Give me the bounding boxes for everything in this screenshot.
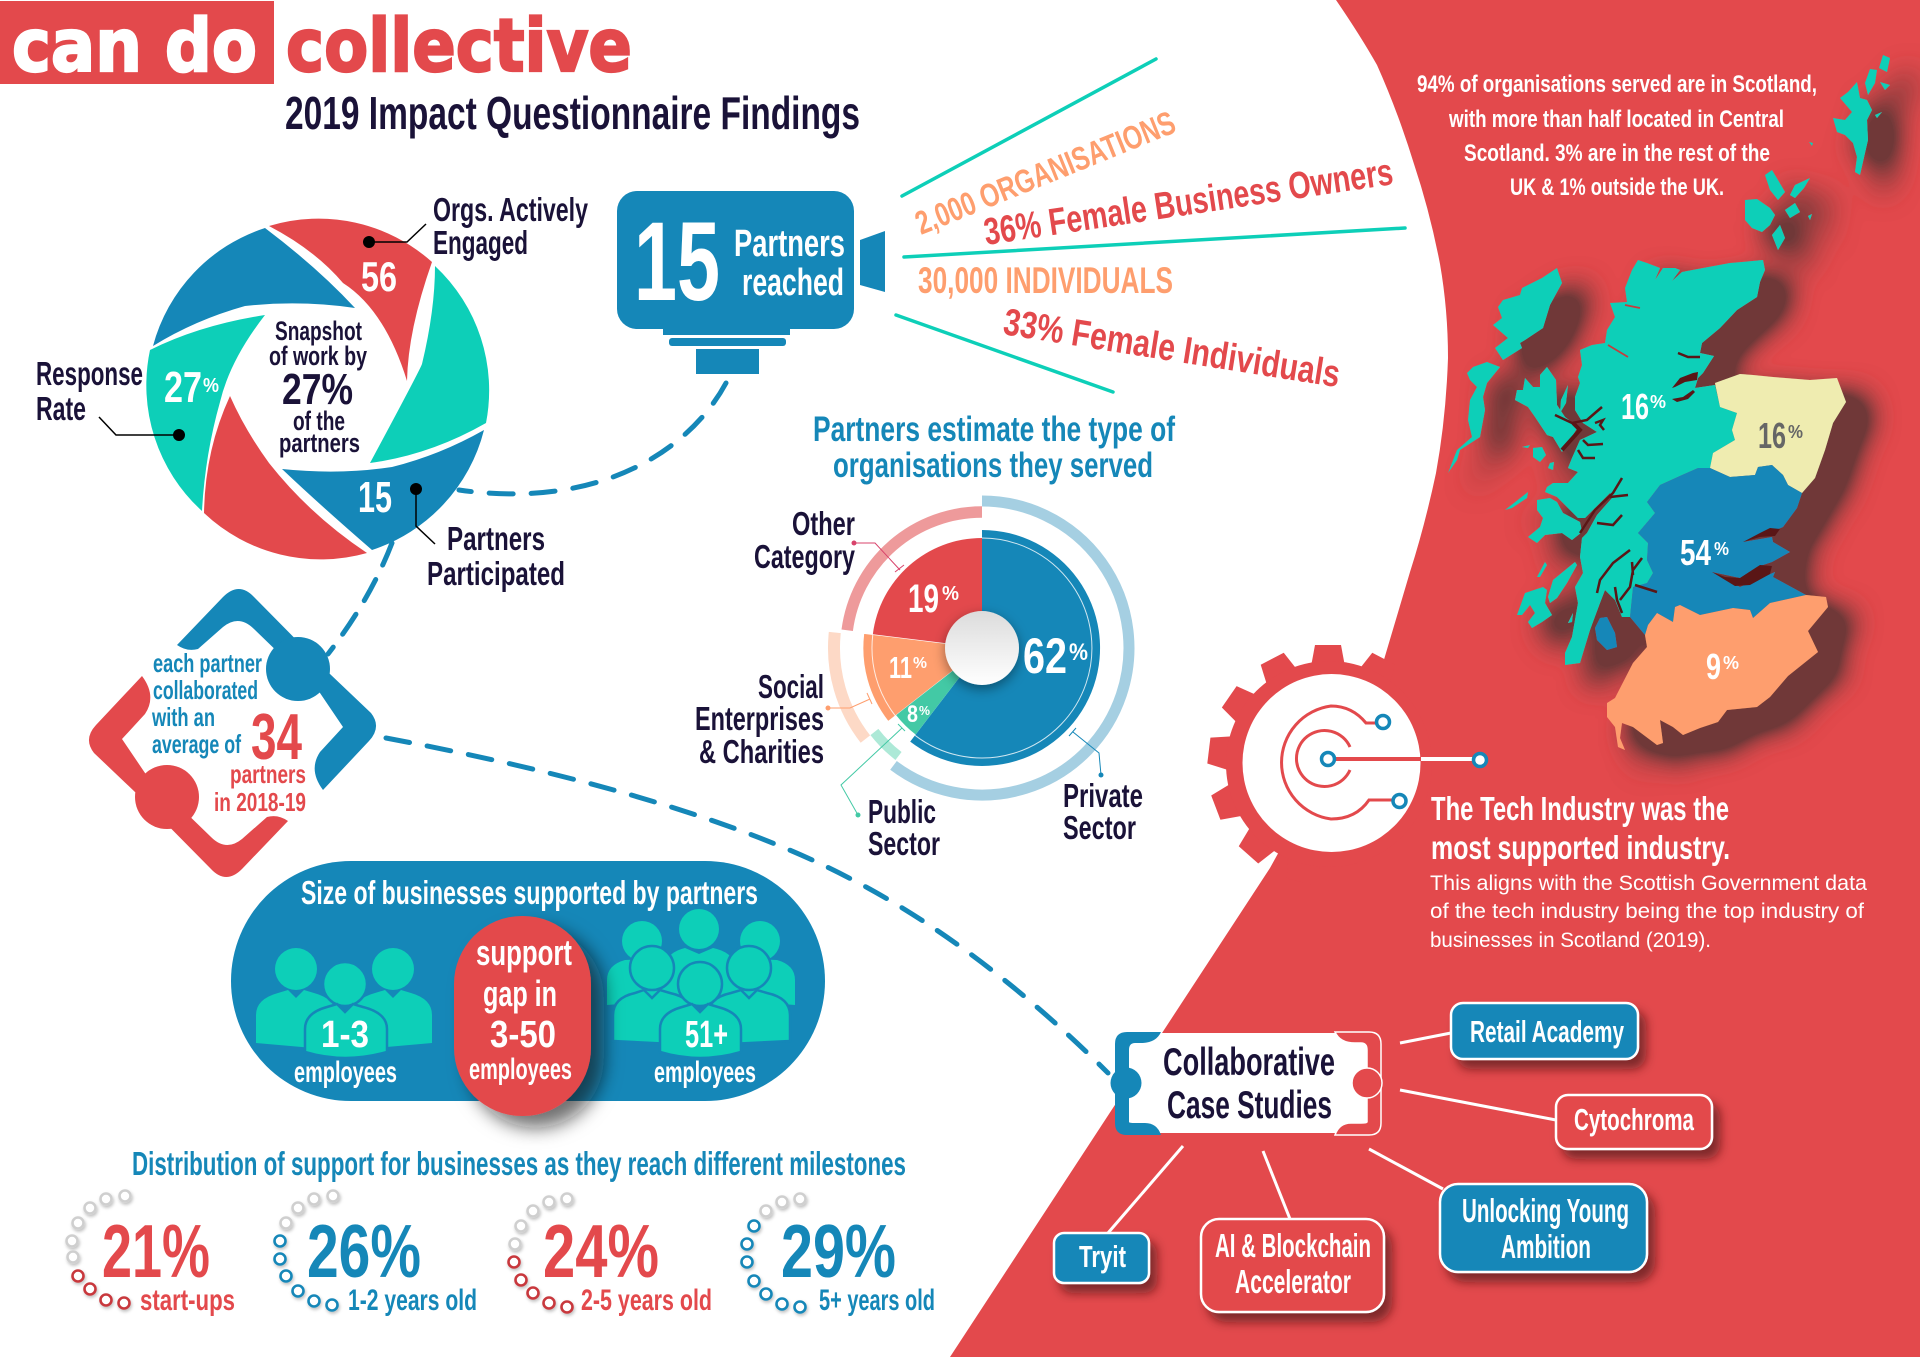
donut values: 19 [908, 577, 939, 621]
map percentages [1621, 386, 1803, 687]
map percentages: % [1714, 539, 1729, 559]
sector: social [863, 634, 982, 721]
text block: organisations in Scotland [1417, 71, 1817, 201]
heading: milestones: Distribution of support for businesses as they reach different milestones [132, 1145, 906, 1182]
donut labels and leaders: & Charities [699, 733, 824, 770]
pie centre text: 27% [282, 365, 353, 414]
red arm [89, 676, 288, 877]
region: North East [1710, 374, 1846, 493]
donut values: % [942, 583, 959, 605]
box: Unlocking Young Ambition: Ambition [1501, 1228, 1591, 1265]
text block: organisations in Scotland: UK & 1% outside the UK. [1510, 174, 1724, 201]
text block: tech industry: of the tech industry being the top industry of [1430, 900, 1864, 923]
box: AI and Blockchain Accelerator: AI & Blockchain [1215, 1227, 1371, 1264]
blade: red lower left [204, 396, 367, 559]
panel: collaborative case studies [1110, 1032, 1382, 1135]
milestone: start-ups: start-ups [140, 1284, 235, 1317]
panel: collaborative case studies: Case Studies [1167, 1084, 1332, 1127]
pie labels and leaders: Rate [36, 390, 86, 427]
partners figure: partners [230, 759, 306, 789]
milestone: start-ups [66, 1190, 235, 1317]
donut labels and leaders: Public [868, 793, 936, 830]
panel: size of businesses: Size of businesses supported by partners [301, 874, 758, 911]
milestone: 5+ years old [742, 1194, 935, 1317]
reach statistics: 30,000 INDIVIDUALS [918, 260, 1173, 301]
pie values: 27 [164, 363, 202, 412]
text block: tech industry: This aligns with the Scottish Government data [1430, 872, 1867, 895]
blade: teal right [370, 266, 489, 463]
pie labels and leaders [36, 191, 588, 592]
icon: tech gear [1207, 645, 1486, 886]
left bracket [1110, 1032, 1161, 1135]
collaboration text: each partner [153, 648, 262, 678]
pie labels and leaders: Orgs. Actively [433, 191, 588, 228]
donut labels and leaders: Enterprises [695, 700, 824, 737]
pie values: % [203, 375, 219, 397]
box: Tryit [1054, 1233, 1149, 1283]
projector: 15 partners reached [617, 191, 885, 374]
donut values [889, 577, 1088, 728]
donut labels and leaders: Other [792, 505, 855, 542]
map of Scotland [1448, 55, 1890, 750]
callout: support gap [454, 916, 591, 1116]
map percentages: 16 [1758, 415, 1786, 456]
text block: tech industry: The Tech Industry was the [1431, 790, 1729, 827]
pie labels and leaders: Participated [427, 555, 565, 592]
panel: size of businesses: 1-3 [321, 1014, 369, 1056]
callout: support gap: support [476, 932, 572, 973]
heading: partner estimates [813, 410, 1175, 485]
callout: support gap: 3-50 [490, 1014, 556, 1056]
donut labels and leaders: Private [1063, 777, 1143, 814]
text block: tech industry [1430, 790, 1867, 952]
reach statistics: 33% Female Individuals [1001, 301, 1343, 396]
pie labels and leaders: Response [36, 355, 143, 392]
region: South [1607, 595, 1828, 750]
icon: small team [256, 948, 432, 1058]
region: Central Scotland [1595, 465, 1806, 650]
donut labels and leaders: Social [758, 668, 824, 705]
text block: organisations in Scotland: 94% of organisations served are in Scotland, [1417, 71, 1817, 98]
connector: boomerang to case studies [386, 738, 1108, 1073]
donut values: 8 [907, 701, 918, 728]
panel: collaborative case studies: Collaborative [1163, 1041, 1335, 1084]
partners figure [214, 700, 306, 817]
heading: partner estimates: Partners estimate the type of [813, 410, 1175, 449]
blue arm [177, 589, 376, 790]
connector: projector to pie [459, 383, 726, 494]
text block: tech industry: most supported industry. [1431, 829, 1730, 866]
heading: partner estimates: organisations they served [833, 446, 1153, 485]
partners figure: 34 [251, 700, 302, 773]
connector: pie to boomerang [328, 543, 392, 654]
milestone: 1-2 years old: 26% [307, 1209, 421, 1293]
donut labels and leaders: Category [754, 538, 855, 575]
map percentages: % [1650, 392, 1666, 412]
blade: blue top left [153, 228, 355, 346]
reach statistics: 2,000 ORGANISATIONS [910, 103, 1180, 241]
milestone: 5+ years old: 5+ years old [819, 1284, 935, 1317]
milestone: start-ups: 21% [102, 1209, 210, 1293]
projector: 15 partners reached: Partners [734, 223, 845, 265]
box: Cytochroma [1556, 1095, 1712, 1149]
donut values: 11 [889, 650, 912, 685]
panel: size of businesses: 51+ [685, 1014, 728, 1056]
title: 2019 Impact Questionnaire Findings [285, 87, 860, 139]
projector beams [896, 59, 1405, 392]
map percentages: % [1788, 422, 1803, 442]
sea lochs and firths [1672, 372, 1780, 586]
map percentages: % [1723, 653, 1739, 673]
projector: 15 partners reached: 15 [634, 199, 720, 324]
reach statistics [910, 103, 1396, 396]
pie centre text: Snapshot [275, 316, 362, 346]
milestone: 2-5 years old: 2-5 years old [581, 1284, 712, 1317]
logo: can do collective [0, 1, 632, 89]
sector: other [873, 538, 982, 648]
donut values: % [913, 655, 927, 672]
logo: can do collective: can do [12, 4, 257, 89]
pie values: 56 [361, 253, 397, 300]
box: Retail Academy [1451, 1003, 1638, 1059]
panel: size of businesses: employees [294, 1056, 397, 1089]
connector lines: case studies [1108, 1033, 1556, 1233]
map percentages: 16 [1621, 386, 1649, 427]
milestone: 1-2 years old [274, 1190, 477, 1317]
logo: can do collective: collective [286, 4, 632, 89]
blade: teal left [146, 315, 265, 511]
pie labels and leaders: Engaged [433, 224, 528, 261]
donut labels and leaders: Sector [868, 825, 940, 862]
box: Retail Academy: Retail Academy [1470, 1014, 1625, 1049]
collaboration text: with an [151, 702, 215, 732]
sector: private [910, 530, 1100, 766]
reach statistics: 36% Female Business Owners [981, 151, 1396, 254]
panel: size of businesses [231, 861, 825, 1116]
region: Highlands and Islands [1448, 55, 1890, 665]
pie values: 15 [358, 473, 392, 522]
box: Unlocking Young Ambition [1440, 1184, 1647, 1272]
pie centre text: of work by [269, 341, 367, 371]
box: Unlocking Young Ambition: Unlocking Young [1462, 1192, 1629, 1229]
outer rings [834, 501, 1129, 795]
donut values: 62 [1023, 628, 1067, 684]
milestone: 1-2 years old: 1-2 years old [348, 1284, 477, 1317]
pie centre text [269, 316, 367, 458]
donut chart [834, 501, 1129, 795]
donut labels and leaders [695, 505, 1143, 862]
text block: tech industry: businesses in Scotland (2019). [1430, 929, 1711, 952]
blade: red top [269, 219, 432, 381]
donut values: % [1069, 639, 1088, 666]
pie values [164, 253, 397, 522]
donut labels and leaders: Sector [1063, 809, 1136, 846]
donut values: % [919, 703, 930, 718]
map percentages: 54 [1680, 532, 1711, 573]
shutter pie chart [146, 219, 489, 559]
text block: organisations in Scotland: with more than half located in Central [1448, 106, 1784, 133]
boomerang collaboration graphic [89, 589, 376, 877]
right bracket [1335, 1032, 1382, 1135]
box: AI and Blockchain Accelerator [1201, 1219, 1384, 1312]
box: Cytochroma: Cytochroma [1574, 1102, 1694, 1137]
milestone: 2-5 years old: 24% [543, 1209, 659, 1293]
collaboration text [151, 648, 262, 759]
milestone: 5+ years old: 29% [781, 1209, 896, 1293]
pie labels and leaders: Partners [447, 520, 545, 557]
partners figure: in 2018-19 [214, 787, 306, 817]
gear teeth [1207, 645, 1432, 886]
projector: 15 partners reached: reached [742, 262, 844, 304]
blade: blue bottom [282, 430, 484, 550]
box: Tryit: Tryit [1079, 1239, 1126, 1274]
panel: size of businesses: employees [654, 1056, 756, 1089]
circuit traces [1282, 706, 1392, 819]
pie centre text: of the [293, 406, 345, 436]
hub [945, 611, 1019, 685]
icon: large team [607, 909, 795, 1058]
callout: support gap: gap in [483, 973, 557, 1014]
red background panel [950, 0, 1920, 1357]
box: AI and Blockchain Accelerator: Accelerator [1235, 1263, 1351, 1300]
collaboration text: collaborated [153, 675, 258, 705]
collaboration text: average of [152, 729, 241, 759]
text block: organisations in Scotland: Scotland. 3% are in the rest of the [1464, 140, 1770, 167]
callout: support gap: employees [469, 1053, 572, 1086]
milestone: 2-5 years old [508, 1194, 712, 1317]
sector: public [896, 648, 982, 734]
pie centre text: partners [279, 428, 360, 458]
map percentages: 9 [1706, 646, 1721, 687]
